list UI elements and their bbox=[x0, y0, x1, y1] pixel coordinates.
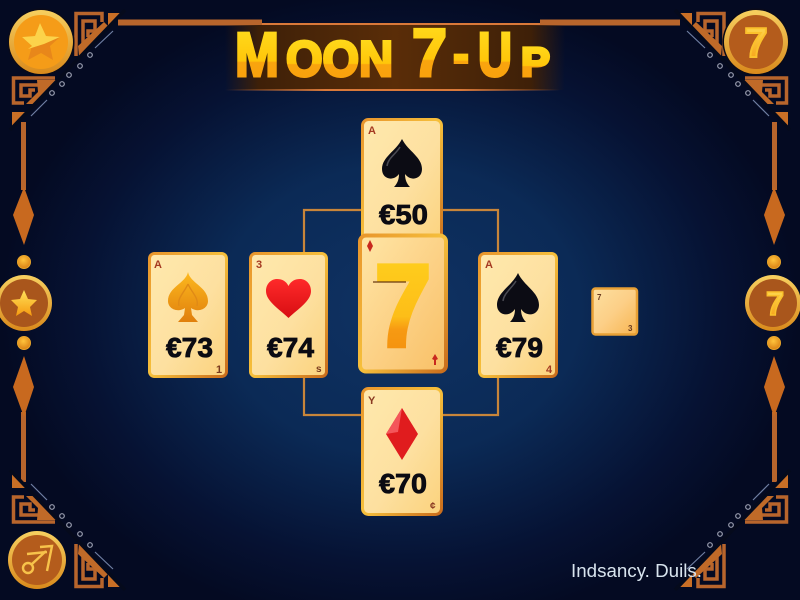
rank: A bbox=[154, 259, 162, 271]
left frame bar bbox=[21, 122, 26, 482]
icon: golden flame spade bbox=[168, 272, 208, 322]
card: bottom €70 bbox=[362, 388, 442, 514]
title text: - bbox=[453, 20, 469, 89]
top frame bar bbox=[118, 20, 680, 26]
card: €79 bbox=[480, 254, 556, 376]
lower diamond bbox=[764, 356, 785, 417]
lower diamond bbox=[13, 356, 34, 417]
title text bbox=[235, 15, 550, 91]
icon: heart bbox=[266, 279, 311, 318]
star medallion bbox=[0, 275, 52, 331]
rank: A bbox=[368, 125, 376, 137]
icon: spade bbox=[497, 273, 539, 322]
top-right corner ornament bbox=[675, 10, 790, 130]
top-left corner ornament bbox=[10, 10, 125, 130]
icon: arrow key coin bbox=[8, 531, 66, 589]
card: €73 bbox=[150, 254, 226, 376]
upper diamond bbox=[764, 187, 785, 245]
left side ornament bbox=[0, 187, 52, 417]
bottom-left corner ornament bbox=[10, 470, 125, 590]
connector lines bbox=[304, 210, 498, 415]
seven medallion: 7 bbox=[766, 285, 784, 322]
gold balls bbox=[768, 256, 780, 350]
corner mark: 1 bbox=[216, 364, 222, 376]
price: €79 bbox=[496, 332, 543, 363]
title text: M bbox=[235, 21, 279, 90]
title bottom rule bbox=[225, 89, 560, 91]
price: €74 bbox=[267, 332, 314, 363]
card: centre seven bbox=[360, 236, 446, 372]
upper diamond bbox=[13, 187, 34, 245]
price: €70 bbox=[379, 468, 427, 499]
icon: small diamond pip bbox=[367, 240, 373, 252]
title top rule bbox=[262, 23, 540, 25]
corner mark: ¢ bbox=[430, 501, 436, 512]
price: €73 bbox=[166, 332, 213, 363]
icon: spade bbox=[382, 139, 422, 187]
rank: Y bbox=[368, 395, 376, 407]
corner mark: 3 bbox=[628, 324, 633, 333]
title text: U bbox=[478, 21, 512, 90]
icon: seven coin: 7 bbox=[744, 19, 768, 66]
right side ornament bbox=[745, 187, 800, 417]
title text: 7 bbox=[412, 15, 447, 91]
title bbox=[225, 15, 565, 91]
card: €74 bbox=[250, 254, 326, 376]
corner mark: s bbox=[316, 364, 322, 375]
corner mark: 4 bbox=[546, 364, 553, 376]
rank: 3 bbox=[256, 259, 262, 271]
big seven: 7 bbox=[375, 241, 431, 371]
seven inner shadow line bbox=[373, 281, 406, 283]
seven medallion bbox=[745, 275, 800, 331]
title text: P bbox=[521, 39, 550, 85]
right frame bar bbox=[772, 122, 777, 482]
icon: seven coin bbox=[722, 8, 790, 76]
caption: Indsancy. Duils. bbox=[571, 560, 702, 581]
card: top €50 bbox=[362, 120, 442, 250]
rank: 7 bbox=[597, 293, 602, 302]
title glow band bbox=[225, 25, 565, 90]
icon: gold star coin bbox=[8, 8, 74, 76]
price: €50 bbox=[379, 199, 428, 230]
rank: A bbox=[485, 259, 493, 271]
small blank card bbox=[592, 288, 637, 334]
title text: OON bbox=[286, 31, 393, 87]
bottom-right corner ornament bbox=[675, 470, 790, 590]
icon: small club pip bbox=[432, 354, 438, 365]
icon: diamond bbox=[386, 408, 418, 460]
gold balls bbox=[18, 256, 30, 350]
